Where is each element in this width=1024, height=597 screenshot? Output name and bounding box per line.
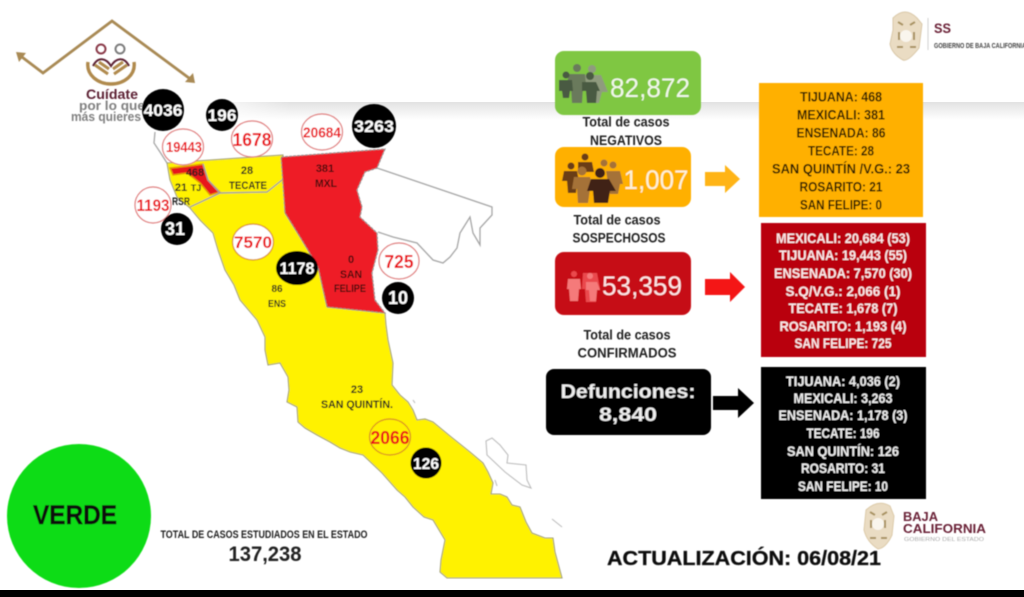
logo: Secretaría de Salud, Gobierno de Baja California <box>890 12 1024 60</box>
arrow: sospechosos <box>705 165 740 193</box>
panel: sospechosos por municipio: ENSENADA: 86 <box>796 124 886 140</box>
map labels: TJ <box>191 183 201 193</box>
logo: Cuídate por lo que más quieres: Cuídate <box>86 87 139 102</box>
confirmed case numbers <box>136 126 414 448</box>
panel: defunciones por municipio: SAN FELIPE: 10 <box>798 478 888 494</box>
panel: sospechosos por municipio: MEXICALI: 381 <box>797 106 885 122</box>
region: Ensenada, Tecate, Rosarito, San Quintín (yellow) <box>167 155 562 578</box>
label: sospechosos: Total de casos <box>574 212 660 228</box>
map labels: MXL <box>315 178 337 190</box>
map labels: SAN QUINTÍN. <box>321 398 393 411</box>
map labels: 86 <box>271 284 283 295</box>
confirmed case numbers: 19443 <box>166 140 202 156</box>
panel: sospechosos por municipio: SAN QUINTÍN /V.G.: 23 <box>772 160 910 176</box>
panel: defunciones por municipio: ENSENADA: 1,178 (3) <box>778 407 908 423</box>
panel: confirmados por municipio: SAN FELIPE: 725 <box>794 335 892 351</box>
panel: defunciones por municipio: MEXICALI: 3,263 <box>794 390 893 406</box>
region: Tijuana (red) <box>170 164 220 195</box>
map labels: FELIPE <box>334 283 366 295</box>
confirmed case bubbles <box>135 114 419 455</box>
panel: sospechosos por municipio <box>759 83 923 217</box>
map: Sonora outline <box>377 168 492 263</box>
confirmed case numbers: 20684 <box>303 126 341 142</box>
map labels: TECATE <box>229 180 267 192</box>
death numbers: 196 <box>208 106 236 125</box>
confirmed case numbers: 2066 <box>370 428 410 448</box>
map labels: 468 <box>186 167 204 179</box>
map labels: SAN <box>340 269 362 281</box>
update date: ACTUALIZACIÓN: 06/08/21 <box>607 546 881 570</box>
map: Baja California state <box>167 149 562 578</box>
logo: Cuídate por lo que más quieres: por lo que <box>79 98 145 113</box>
death numbers: 1178 <box>280 259 314 278</box>
death numbers: 4036 <box>144 101 182 120</box>
panel: defunciones por municipio: SAN QUINTÍN: 126 <box>787 443 899 459</box>
panel: confirmados por municipio: TECATE: 1,678 (7) <box>788 300 898 316</box>
panel: confirmados por municipio: MEXICALI: 20,684 (53) <box>776 230 910 246</box>
state total <box>160 529 368 566</box>
death bubbles <box>142 89 442 478</box>
bottom bar <box>0 590 1024 597</box>
panel: defunciones por municipio: TIJUANA: 4,036 (2) <box>786 373 900 389</box>
confirmed case numbers: 7570 <box>234 233 272 252</box>
label: confirmados: CONFIRMADOS <box>578 346 676 360</box>
panel: sospechosos por municipio: ROSARITO: 21 <box>800 178 883 194</box>
label: sospechosos <box>572 212 666 246</box>
logo: Secretaría de Salud, Gobierno de Baja California: SS <box>934 20 951 36</box>
confirmed case numbers: 1193 <box>136 196 170 215</box>
label: confirmados <box>578 328 676 360</box>
death numbers: 3263 <box>354 117 394 136</box>
status circle: VERDE: VERDE <box>33 500 117 530</box>
state total: TOTAL DE CASOS ESTUDIADOS EN EL ESTADO <box>160 529 368 541</box>
logo: Baja California Gobierno del Estado <box>864 503 986 549</box>
arrow: confirmados <box>705 272 745 302</box>
icon: people red <box>567 271 600 302</box>
panel: defunciones por municipio <box>761 367 926 499</box>
panel: defunciones: Defunciones: <box>560 382 696 403</box>
panel: confirmados por municipio: ENSENADA: 7,570 (30) <box>774 265 912 281</box>
confirmed case numbers: 725 <box>384 252 414 272</box>
map labels: 381 <box>316 163 334 175</box>
map labels: ENS <box>268 299 286 310</box>
panel: confirmados <box>555 252 691 315</box>
death numbers: 126 <box>413 456 439 473</box>
death numbers: 31 <box>165 219 185 239</box>
panel: defunciones por municipio: ROSARITO: 31 <box>801 460 885 476</box>
map labels: 23 <box>351 384 363 396</box>
panel: confirmados por municipio <box>761 223 926 357</box>
status circle: VERDE <box>7 444 151 588</box>
logo: Cuídate por lo que más quieres <box>16 21 195 124</box>
map: Baja California Sur islands <box>413 400 562 527</box>
panel: defunciones <box>546 369 711 435</box>
map labels: RSR <box>172 196 190 208</box>
logo: Baja California Gobierno del Estado: BAJA <box>903 510 938 524</box>
panel: confirmados por municipio: S.Q/V.G.: 2,066 (1) <box>786 283 900 299</box>
death numbers <box>144 101 439 473</box>
death numbers: 10 <box>388 288 408 308</box>
map labels: 0 <box>348 254 354 266</box>
panel: negativos: 82,872 <box>610 73 690 103</box>
panel: sospechosos por municipio: TECATE: 28 <box>808 142 874 158</box>
panel: defunciones por municipio: TECATE: 196 <box>806 425 880 441</box>
map: northwest coast outline <box>154 132 167 163</box>
map labels: 28 <box>241 165 253 177</box>
municipal borders <box>190 164 282 207</box>
panel: sospechosos: 1,007 <box>624 165 688 195</box>
label: sospechosos: SOSPECHOSOS <box>572 230 666 246</box>
panel: confirmados por municipio: ROSARITO: 1,193 (4) <box>780 318 906 334</box>
panel: sospechosos por municipio: SAN FELIPE: 0 <box>800 196 882 212</box>
label: negativos <box>582 114 670 148</box>
label: negativos: NEGATIVOS <box>590 133 662 148</box>
confirmed case numbers: 1678 <box>232 130 272 150</box>
region: Mexicali and San Felipe (red) <box>281 149 385 313</box>
icon: people brown <box>562 154 623 203</box>
panel: sospechosos <box>555 147 691 207</box>
label: confirmados: Total de casos <box>584 328 670 342</box>
icon: people gray <box>559 64 608 103</box>
logo: Baja California Gobierno del Estado: GOBIERNO DEL ESTADO <box>904 537 985 543</box>
label: negativos: Total de casos <box>582 114 670 130</box>
map labels: 21 <box>175 182 187 194</box>
arrow: defunciones <box>713 388 754 418</box>
logo: Cuídate por lo que más quieres: más quieres <box>71 109 141 124</box>
logo: Baja California Gobierno del Estado: CALIFORNIA <box>903 522 986 536</box>
panel: sospechosos por municipio: TIJUANA: 468 <box>800 88 882 104</box>
map labels <box>172 163 393 411</box>
panel: negativos <box>555 51 701 115</box>
state total: 137,238 <box>228 543 302 566</box>
panel: confirmados: 53,359 <box>602 271 682 301</box>
panel: defunciones: 8,840 <box>599 405 657 426</box>
panel: confirmados por municipio: TIJUANA: 19,443 (55) <box>779 247 907 263</box>
